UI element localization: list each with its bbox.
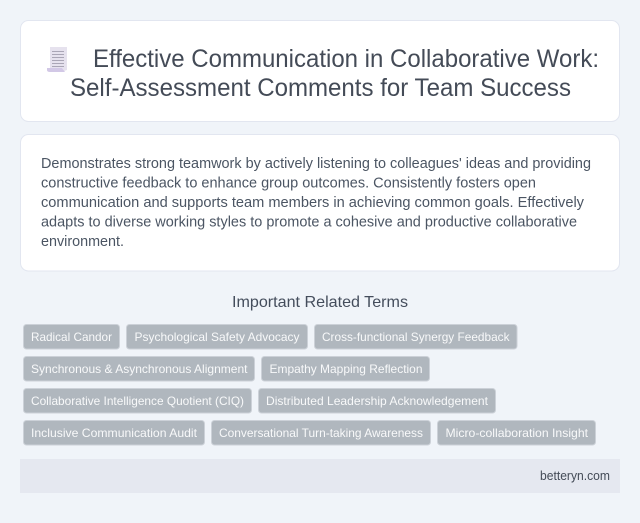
tag: Psychological Safety Advocacy	[126, 324, 308, 349]
panel: header card	[20, 20, 620, 122]
tag: Micro-collaboration Insight	[438, 420, 596, 445]
text block: self-assessment comment	[41, 156, 591, 250]
tag: Synchronous & Asynchronous Alignment	[24, 356, 254, 381]
text block: self-assessment comment: adapts to diverse working styles to promote a cohesive and productive collaborative	[41, 214, 577, 230]
text block: self-assessment comment: constructive feedback to enhance group outcomes. Consistently fosters open	[41, 176, 536, 192]
tag: Radical Candor	[24, 324, 120, 349]
tag: Conversational Turn-taking Awareness	[212, 420, 430, 445]
tag: Cross-functional Synergy Feedback: Cross-functional Synergy Feedback	[322, 330, 510, 344]
title: Self-Assessment Comments for Team Success	[70, 74, 571, 102]
text block: self-assessment comment: Demonstrates strong teamwork by actively listening to colleagues' ideas and providing	[41, 156, 591, 172]
tag: Distributed Leadership Acknowledgement: Distributed Leadership Acknowledgement	[266, 394, 489, 408]
title	[70, 45, 599, 102]
footer bar	[20, 459, 620, 493]
tag: Cross-functional Synergy Feedback	[314, 324, 517, 349]
icon: scroll document	[47, 47, 67, 72]
panel: related term tags	[24, 324, 596, 445]
footer text: betteryn.com: betteryn.com	[540, 469, 610, 483]
tag: Micro-collaboration Insight: Micro-collaboration Insight	[446, 426, 589, 440]
text block: self-assessment comment: environment.	[41, 234, 124, 250]
tag: Inclusive Communication Audit	[24, 420, 204, 445]
title: Effective Communication in Collaborative Work:	[93, 45, 599, 73]
heading: important related terms: Important Related Terms	[232, 294, 408, 311]
tag: Collaborative Intelligence Quotient (CIQ): Collaborative Intelligence Quotient (CIQ)	[31, 394, 244, 408]
tag: Synchronous & Asynchronous Alignment: Synchronous & Asynchronous Alignment	[31, 362, 248, 376]
tag: Empathy Mapping Reflection	[262, 356, 430, 381]
text block: self-assessment comment: communication and supports team members in achieving common goals. Effectively	[41, 195, 585, 211]
tag: Psychological Safety Advocacy: Psychological Safety Advocacy	[134, 330, 300, 344]
tag: Empathy Mapping Reflection: Empathy Mapping Reflection	[270, 362, 422, 376]
tag: Radical Candor: Radical Candor	[31, 330, 112, 344]
tag: Inclusive Communication Audit: Inclusive Communication Audit	[31, 426, 198, 440]
tag: Distributed Leadership Acknowledgement	[258, 388, 496, 413]
tag: Collaborative Intelligence Quotient (CIQ)	[24, 388, 252, 413]
tag: Conversational Turn-taking Awareness: Conversational Turn-taking Awareness	[219, 426, 423, 440]
panel: description card	[20, 134, 620, 271]
